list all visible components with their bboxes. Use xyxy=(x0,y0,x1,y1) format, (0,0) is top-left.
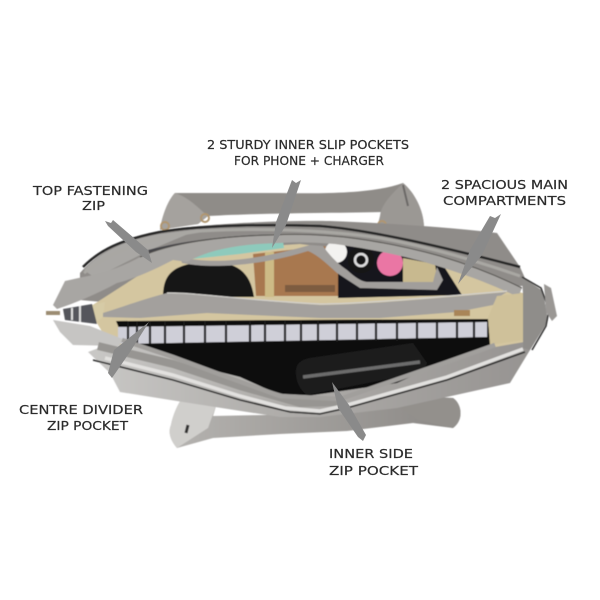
white cap xyxy=(325,241,347,263)
label: inner side zip pocket: ZIP POCKET xyxy=(329,463,418,478)
label: 2 sturdy inner slip pockets xyxy=(207,137,409,168)
back panel light left xyxy=(84,229,200,278)
right side panel xyxy=(522,277,557,350)
dark back pocket opening xyxy=(148,234,300,260)
inner side zip pouch xyxy=(296,343,427,395)
brown cosmetic case xyxy=(253,246,338,296)
label: top fastening zip xyxy=(32,183,148,213)
label: centre divider zip pocket xyxy=(19,402,143,433)
tan side pocket xyxy=(403,258,438,282)
arrow: main compartments xyxy=(458,214,501,284)
arrow: inner side zip pocket xyxy=(332,382,366,441)
bag back panel xyxy=(80,221,528,320)
upper light band xyxy=(84,229,520,276)
zip bands xyxy=(53,225,522,322)
teal phone xyxy=(188,241,284,259)
black compact xyxy=(163,262,254,297)
label: top fastening zip: TOP FASTENING xyxy=(32,183,148,198)
label: 2 spacious main compartments xyxy=(441,177,568,208)
slip pocket edge xyxy=(180,245,443,290)
label: 2 spacious main compartments: COMPARTMENTS xyxy=(443,193,566,208)
pink cap xyxy=(377,250,403,276)
black patterned cap xyxy=(348,247,374,273)
lower left cap xyxy=(53,320,125,346)
arrow: top fastening zip xyxy=(105,220,152,263)
handbag photo xyxy=(46,183,557,448)
arrow: centre divider xyxy=(108,322,149,378)
dark zip line xyxy=(83,225,520,267)
label: centre divider zip pocket: CENTRE DIVIDER xyxy=(19,402,143,417)
left end xyxy=(46,304,125,346)
label: 2 spacious main compartments: 2 SPACIOUS MAIN xyxy=(441,177,568,192)
notebook xyxy=(118,321,487,345)
label: inner side zip pocket: INNER SIDE xyxy=(329,446,413,461)
black interior lower xyxy=(116,319,490,397)
label: 2 sturdy inner slip pockets: 2 STURDY INNER SLIP POCKETS xyxy=(207,137,409,152)
back handle xyxy=(160,183,427,236)
tan fold xyxy=(92,302,105,322)
dark interior behind caps xyxy=(338,245,462,298)
zipper pull xyxy=(46,311,60,315)
left stripes xyxy=(63,304,97,324)
front handle xyxy=(170,388,461,448)
label: top fastening zip: ZIP xyxy=(82,198,106,213)
centre divider pocket xyxy=(103,291,524,345)
arrow: slip pockets xyxy=(272,180,301,248)
bag front panel xyxy=(88,300,547,417)
label: 2 sturdy inner slip pockets: FOR PHONE + CHARGER xyxy=(234,153,384,168)
interior xyxy=(88,234,525,348)
top fastening zip band xyxy=(53,234,522,309)
tan lining xyxy=(88,244,525,348)
label: centre divider zip pocket: ZIP POCKET xyxy=(47,418,128,433)
label: inner side zip pocket xyxy=(329,446,418,478)
front zip edges xyxy=(93,340,525,414)
